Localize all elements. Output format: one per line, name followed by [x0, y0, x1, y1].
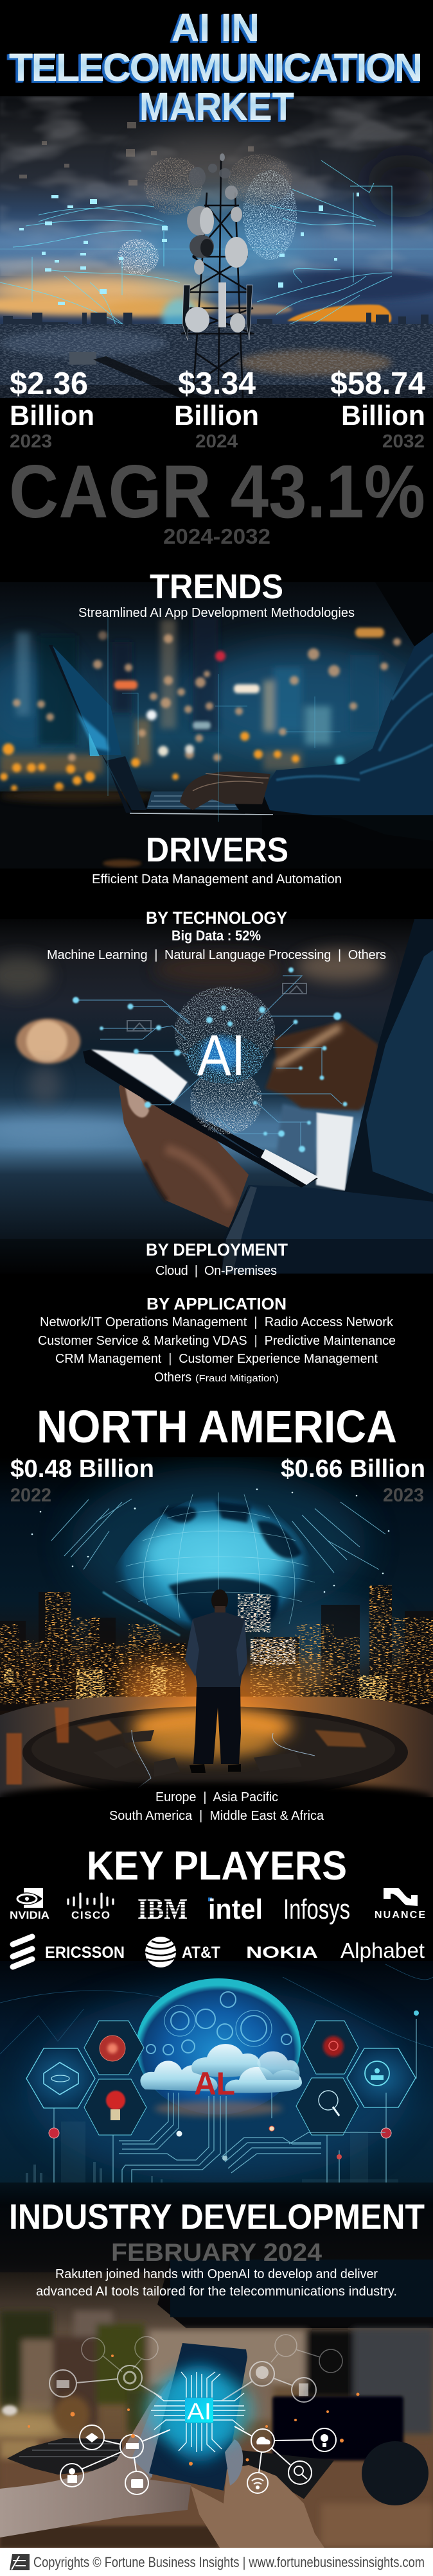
logo: IBM: IBM	[137, 1892, 188, 1925]
logo: NVIDIA	[10, 1888, 49, 1921]
title: AI in Telecommunication Market	[9, 6, 423, 128]
stat 2023: $2.36	[10, 367, 88, 401]
wall and plant	[0, 2311, 433, 2434]
logo: Nuance: NUANCE	[375, 1910, 425, 1921]
logo: AT&T	[145, 1937, 220, 1967]
person in jacket	[103, 578, 433, 869]
AI cloud image: hexagons and circuits	[0, 1961, 433, 2195]
data streams	[0, 160, 433, 324]
by application segment: (Fraud Mitigation)	[195, 1373, 279, 1384]
by technology segment	[47, 908, 386, 962]
sphere	[136, 1978, 301, 2116]
orbit streaks	[51, 1499, 385, 1573]
footer	[0, 2548, 433, 2576]
drivers heading: DRIVERS	[146, 831, 288, 869]
logo: Infosys: Infosys	[283, 1894, 350, 1925]
logo: Cisco: CISCO	[71, 1909, 110, 1921]
development description: Rakuten joined hands with OpenAI to develop and deliver	[55, 2267, 378, 2281]
stat 2032	[330, 367, 425, 452]
stat 2024: Billion	[174, 400, 259, 431]
industry image: hands holding AI phone on desk	[0, 2183, 433, 2550]
mouse	[362, 2441, 429, 2505]
by deployment segment: Cloud | On-Premises	[155, 1264, 277, 1278]
title: AI in Telecommunication Market: TELECOMMUNICATION	[9, 46, 423, 89]
monitor	[157, 2260, 433, 2328]
globe image: businessman facing holographic globe	[0, 1457, 433, 1813]
data particles	[19, 193, 359, 305]
logo: Cisco	[68, 1894, 113, 1921]
by technology segment: BY TECHNOLOGY	[146, 908, 287, 928]
AI head hologram: AI	[197, 1024, 245, 1088]
by application segment	[38, 1294, 396, 1385]
trends image: laptop with bokeh city	[0, 578, 433, 869]
AL lettering: AL	[194, 2066, 235, 2102]
development description: advanced AI tools tailored for the telecommunications industry.	[36, 2285, 397, 2299]
by application segment: CRM Management | Customer Experience Management	[55, 1352, 378, 1366]
development description	[36, 2267, 397, 2299]
stat 2024: $3.34	[178, 367, 256, 401]
logo: AT&T: AT&T	[182, 1944, 220, 1962]
by technology segment: Big Data : 52%	[172, 928, 261, 944]
other regions	[109, 1790, 324, 1823]
blurred buildings	[0, 616, 379, 774]
by deployment segment: BY DEPLOYMENT	[146, 1240, 288, 1259]
floor tiles and reflections	[6, 1707, 366, 1788]
right hand	[265, 1021, 378, 1111]
title: AI in Telecommunication Market: AI IN	[172, 6, 260, 49]
suit	[222, 919, 433, 1274]
trends heading: TRENDS	[150, 567, 283, 606]
market size stats	[10, 367, 425, 452]
tablet	[83, 1050, 318, 1188]
stat 2024	[174, 367, 259, 452]
north america heading and values: 2022	[10, 1485, 51, 1506]
logo: Ericsson: ERICSSON	[45, 1944, 125, 1962]
north america heading and values: $0.66 Billion	[281, 1455, 425, 1483]
title: AI in Telecommunication Market: MARKET	[139, 85, 294, 128]
trends heading	[78, 567, 355, 620]
stat 2023: Billion	[10, 400, 94, 431]
AI head hologram	[175, 987, 275, 1134]
paper behind tablet	[316, 1112, 353, 1191]
stat 2024: 2024	[195, 431, 238, 452]
north america heading and values	[10, 1402, 425, 1506]
key players heading: KEY PLAYERS	[87, 1844, 347, 1889]
network icon rings	[49, 2335, 342, 2494]
development date: FEBRUARY 2024	[111, 2239, 322, 2267]
north america heading and values: $0.48 Billion	[10, 1455, 154, 1483]
dark box on desk	[272, 2396, 403, 2460]
stat 2032: 2032	[382, 431, 425, 452]
key player logos	[10, 1888, 425, 1967]
north america heading and values: NORTH AMERICA	[37, 1402, 397, 1453]
bokeh lights	[0, 628, 401, 791]
other regions: Europe | Asia Pacific	[155, 1790, 278, 1804]
night city lights	[0, 1586, 433, 1704]
logo: Intel: intel	[208, 1894, 263, 1925]
stat 2023	[10, 367, 94, 452]
by application segment: Customer Service & Marketing VDAS | Predictive Maintenance	[38, 1334, 396, 1348]
logo: Ericsson	[13, 1937, 125, 1967]
logo: Alphabet: Alphabet	[340, 1939, 425, 1962]
logo: Nuance	[375, 1888, 425, 1921]
north america heading and values: 2023	[383, 1485, 424, 1506]
arms and hands	[0, 2380, 191, 2537]
desk	[0, 2439, 433, 2548]
city skyline	[0, 313, 433, 401]
hero image: telecom tower at dusk	[0, 96, 433, 401]
telecom tower	[181, 153, 254, 398]
logo: NVIDIA: NVIDIA	[10, 1909, 49, 1921]
trends heading: Streamlined AI App Development Methodologies	[78, 606, 355, 620]
left hand	[119, 1082, 249, 1228]
logo: Nokia: NOKIA	[246, 1944, 318, 1962]
stat 2023: 2023	[10, 431, 52, 452]
drivers heading: Efficient Data Management and Automation	[92, 872, 342, 886]
holographic globe	[103, 1492, 317, 1636]
clouds	[140, 2044, 302, 2093]
by application segment: BY APPLICATION	[146, 1294, 287, 1313]
bar skyline	[26, 2122, 398, 2183]
hexagons	[26, 2021, 416, 2135]
stat 2032: $58.74	[330, 367, 425, 401]
keyboards	[7, 2438, 122, 2475]
network lines and nodes	[73, 967, 347, 1152]
phone image: AI head above tablet	[0, 919, 433, 1274]
other regions: South America | Middle East & Africa	[109, 1809, 324, 1823]
by deployment segment	[146, 1240, 288, 1278]
embers	[28, 2355, 360, 2466]
laptop	[0, 645, 342, 842]
by technology segment: Machine Learning | Natural Language Processing | Others	[47, 948, 386, 962]
by application segment: Network/IT Operations Management | Radio Access Network	[40, 1315, 394, 1329]
hexagon icons	[44, 2036, 391, 2138]
businessman	[185, 1589, 247, 1773]
icon: Fortune Business Insights logo	[10, 2554, 30, 2570]
CAGR callout: 2024-2032	[163, 524, 270, 548]
stat 2032: Billion	[341, 400, 425, 431]
ring glyphs	[57, 2366, 328, 2489]
AI chip circuit: AI	[187, 2398, 211, 2425]
by application segment: Others	[154, 1370, 191, 1385]
drivers heading	[92, 831, 342, 886]
phone	[149, 2343, 247, 2491]
circuit traces	[54, 2019, 416, 2195]
AI chip circuit	[145, 2372, 254, 2452]
circular floor	[0, 1697, 433, 1797]
